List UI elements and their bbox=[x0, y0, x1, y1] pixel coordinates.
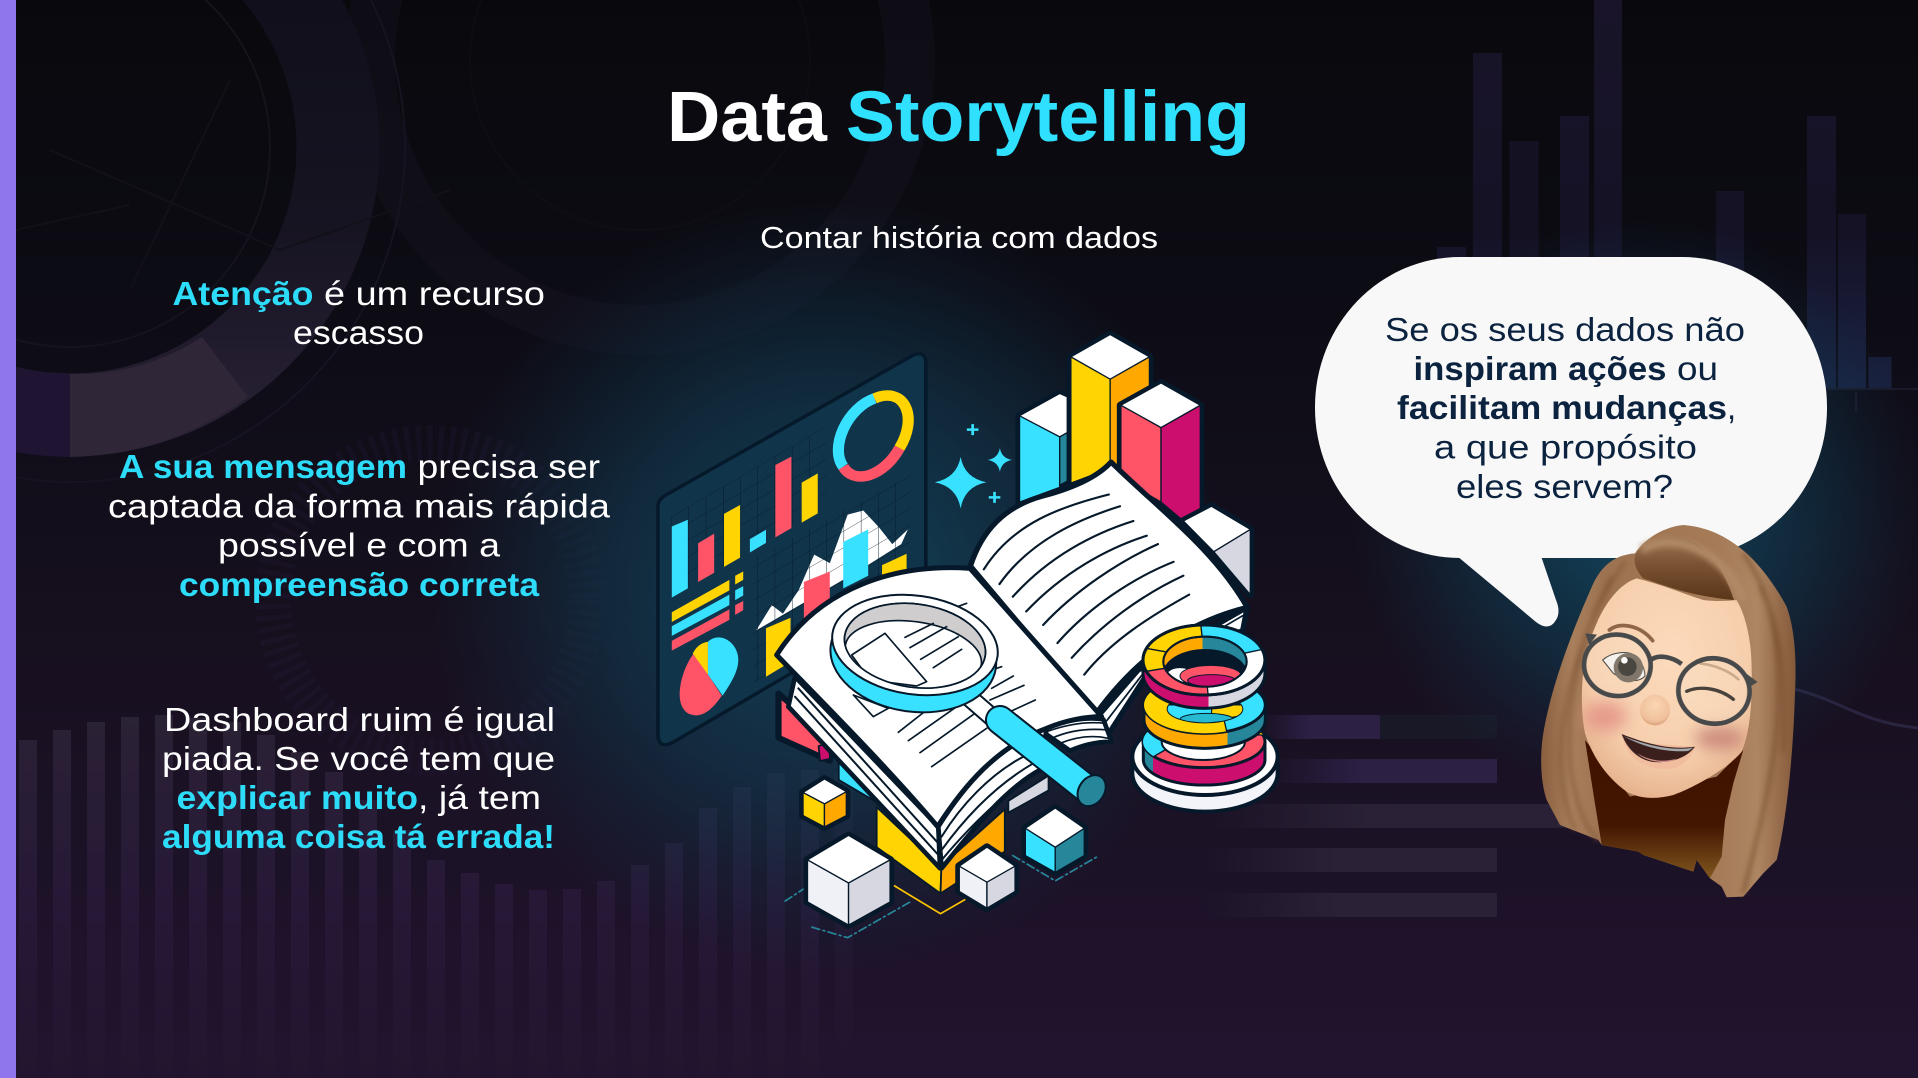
bubble text: a que propósito bbox=[1434, 428, 1697, 466]
bubble tail bbox=[1457, 556, 1558, 627]
face bbox=[1582, 578, 1752, 798]
bubble body bbox=[1315, 257, 1827, 558]
top ring bbox=[1140, 623, 1267, 708]
dashboard panel bbox=[658, 354, 926, 745]
text block: dashboard ruim: , já tem bbox=[418, 779, 541, 816]
bubble text: inspiram ações bbox=[1414, 350, 1666, 387]
hair swoop bbox=[1635, 537, 1743, 600]
front layer of illustration bbox=[777, 568, 1112, 868]
bottom ring bbox=[1142, 731, 1266, 786]
large white cube bbox=[807, 835, 890, 925]
speech bubble bbox=[1315, 257, 1827, 627]
text block: a sua mensagem bbox=[108, 448, 611, 603]
bubble text: , bbox=[1727, 389, 1736, 426]
nose bbox=[1640, 695, 1670, 725]
middle ring bbox=[1142, 690, 1267, 750]
neck shadow bbox=[1585, 740, 1743, 878]
left accent bar bbox=[0, 0, 16, 1078]
text block: dashboard ruim: Dashboard ruim é igual bbox=[164, 701, 555, 738]
yellow cube bbox=[803, 779, 846, 827]
illustration: book and data bbox=[658, 335, 1278, 938]
blush bbox=[1583, 702, 1745, 750]
text block: a sua mensagem: A sua mensagem bbox=[119, 448, 407, 485]
lower page stack bbox=[938, 728, 1047, 868]
dashed floor marks bbox=[785, 856, 1098, 938]
text block: atenção: escasso bbox=[293, 314, 424, 351]
open eye bbox=[1603, 653, 1645, 682]
text block: dashboard ruim: alguma coisa tá errada! bbox=[162, 818, 555, 855]
base plate bbox=[1132, 718, 1278, 812]
bubble text bbox=[1385, 311, 1745, 505]
title: Data bbox=[667, 78, 828, 157]
left page bbox=[777, 568, 1102, 827]
donut stack bbox=[1132, 623, 1278, 812]
avatar: memoji with glasses bbox=[1541, 525, 1796, 897]
magnifying glass bbox=[823, 585, 1112, 812]
text block: a sua mensagem: precisa ser bbox=[418, 448, 600, 485]
subtitle: Contar história com dados bbox=[760, 220, 1158, 255]
back layer of illustration bbox=[658, 335, 1250, 893]
title: Storytelling bbox=[846, 78, 1250, 157]
text block: atenção: é um recurso bbox=[324, 275, 545, 312]
winking eye bbox=[1687, 688, 1733, 699]
left eyebrow bbox=[1609, 626, 1653, 641]
pedestal blocks bbox=[778, 694, 1049, 893]
glasses bbox=[1580, 630, 1757, 728]
right page bbox=[970, 462, 1247, 734]
bubble text: Se os seus dados não bbox=[1385, 311, 1745, 348]
text block: dashboard ruim: explicar muito bbox=[176, 779, 418, 816]
rear page stack bbox=[1040, 718, 1112, 751]
text block: a sua mensagem: captada da forma mais rápida bbox=[108, 488, 611, 524]
text block: a sua mensagem: possível e com a bbox=[218, 526, 501, 564]
hair bbox=[1541, 525, 1796, 897]
small white cube bbox=[959, 847, 1015, 908]
teal cube bbox=[1025, 808, 1084, 872]
text block: atenção bbox=[172, 275, 545, 351]
text block: dashboard ruim: piada. Se você tem que bbox=[162, 740, 555, 777]
bubble text: facilitam mudanças bbox=[1397, 389, 1727, 426]
text block: atenção: Atenção bbox=[172, 275, 314, 312]
bubble text: eles servem? bbox=[1456, 468, 1673, 505]
front cubes bbox=[785, 779, 1098, 938]
right eyebrow bbox=[1700, 663, 1738, 679]
text block: dashboard ruim bbox=[162, 701, 555, 855]
3d bars bbox=[1020, 335, 1250, 595]
left page stack bbox=[788, 677, 940, 868]
title bbox=[667, 78, 1250, 157]
bubble text: ou bbox=[1677, 350, 1718, 387]
glow behind illustration bbox=[430, 200, 1230, 970]
glow behind speech bubble bbox=[1350, 220, 1918, 800]
text block: a sua mensagem: compreensão correta bbox=[179, 566, 540, 603]
sparkles bbox=[935, 424, 1012, 508]
mouth bbox=[1622, 734, 1695, 769]
